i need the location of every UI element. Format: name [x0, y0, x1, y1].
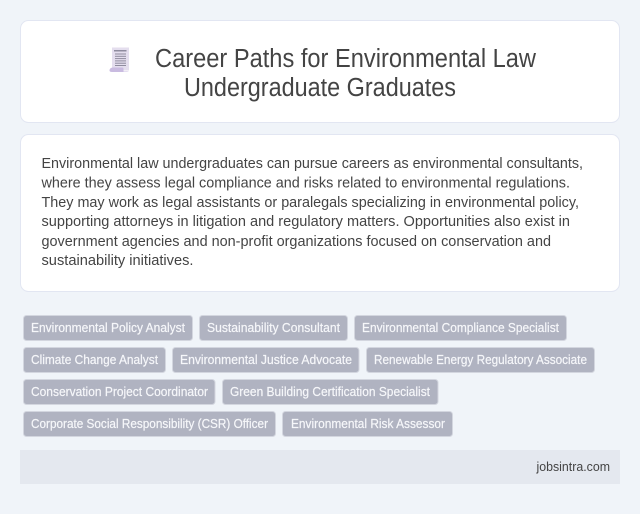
footer: jobsintra.com: [536, 460, 610, 474]
tag: [354, 316, 566, 340]
tag: [222, 380, 438, 404]
description text: Environmental law undergraduates can pursue careers as environmental consultants,: [42, 155, 583, 172]
panel: header: [20, 20, 620, 122]
tag: Environmental Policy Analyst: [31, 321, 185, 335]
tag: [24, 412, 276, 436]
description text: where they assess legal compliance and risks related to environmental regulations.: [41, 174, 570, 192]
description text: government agencies and non-profit organizations focused on conservation and: [42, 233, 551, 250]
description text: [41, 155, 583, 269]
tag: [200, 316, 348, 340]
tag: Environmental Compliance Specialist: [362, 321, 559, 335]
tag: [24, 316, 192, 340]
title: [155, 45, 537, 102]
footer: [20, 450, 620, 484]
tag: Corporate Social Responsibility (CSR) Officer: [31, 417, 268, 431]
tag: [172, 348, 359, 372]
icon: document scroll: [110, 48, 129, 72]
tag: [366, 348, 594, 372]
title: Career Paths for Environmental Law: [155, 45, 537, 73]
tag: Conservation Project Coordinator: [31, 385, 208, 399]
title: Undergraduate Graduates: [184, 74, 456, 102]
tag: [24, 348, 166, 372]
career tags: [24, 316, 594, 436]
tag: Renewable Energy Regulatory Associate: [374, 353, 587, 367]
tag: Environmental Justice Advocate: [180, 353, 352, 367]
description text: sustainability initiatives.: [42, 252, 194, 269]
tag: [282, 412, 452, 436]
tag: Green Building Certification Specialist: [230, 385, 430, 399]
tag: Climate Change Analyst: [31, 353, 159, 367]
tag: Environmental Risk Assessor: [291, 417, 445, 431]
panel: description: [20, 134, 620, 292]
tag: Sustainability Consultant: [207, 321, 341, 335]
description text: They may work as legal assistants or paralegals specializing in environmental policy,: [42, 194, 579, 211]
tag: [24, 380, 215, 404]
description text: supporting attorneys in litigation and regulatory matters. Opportunities also exist in: [42, 213, 570, 230]
